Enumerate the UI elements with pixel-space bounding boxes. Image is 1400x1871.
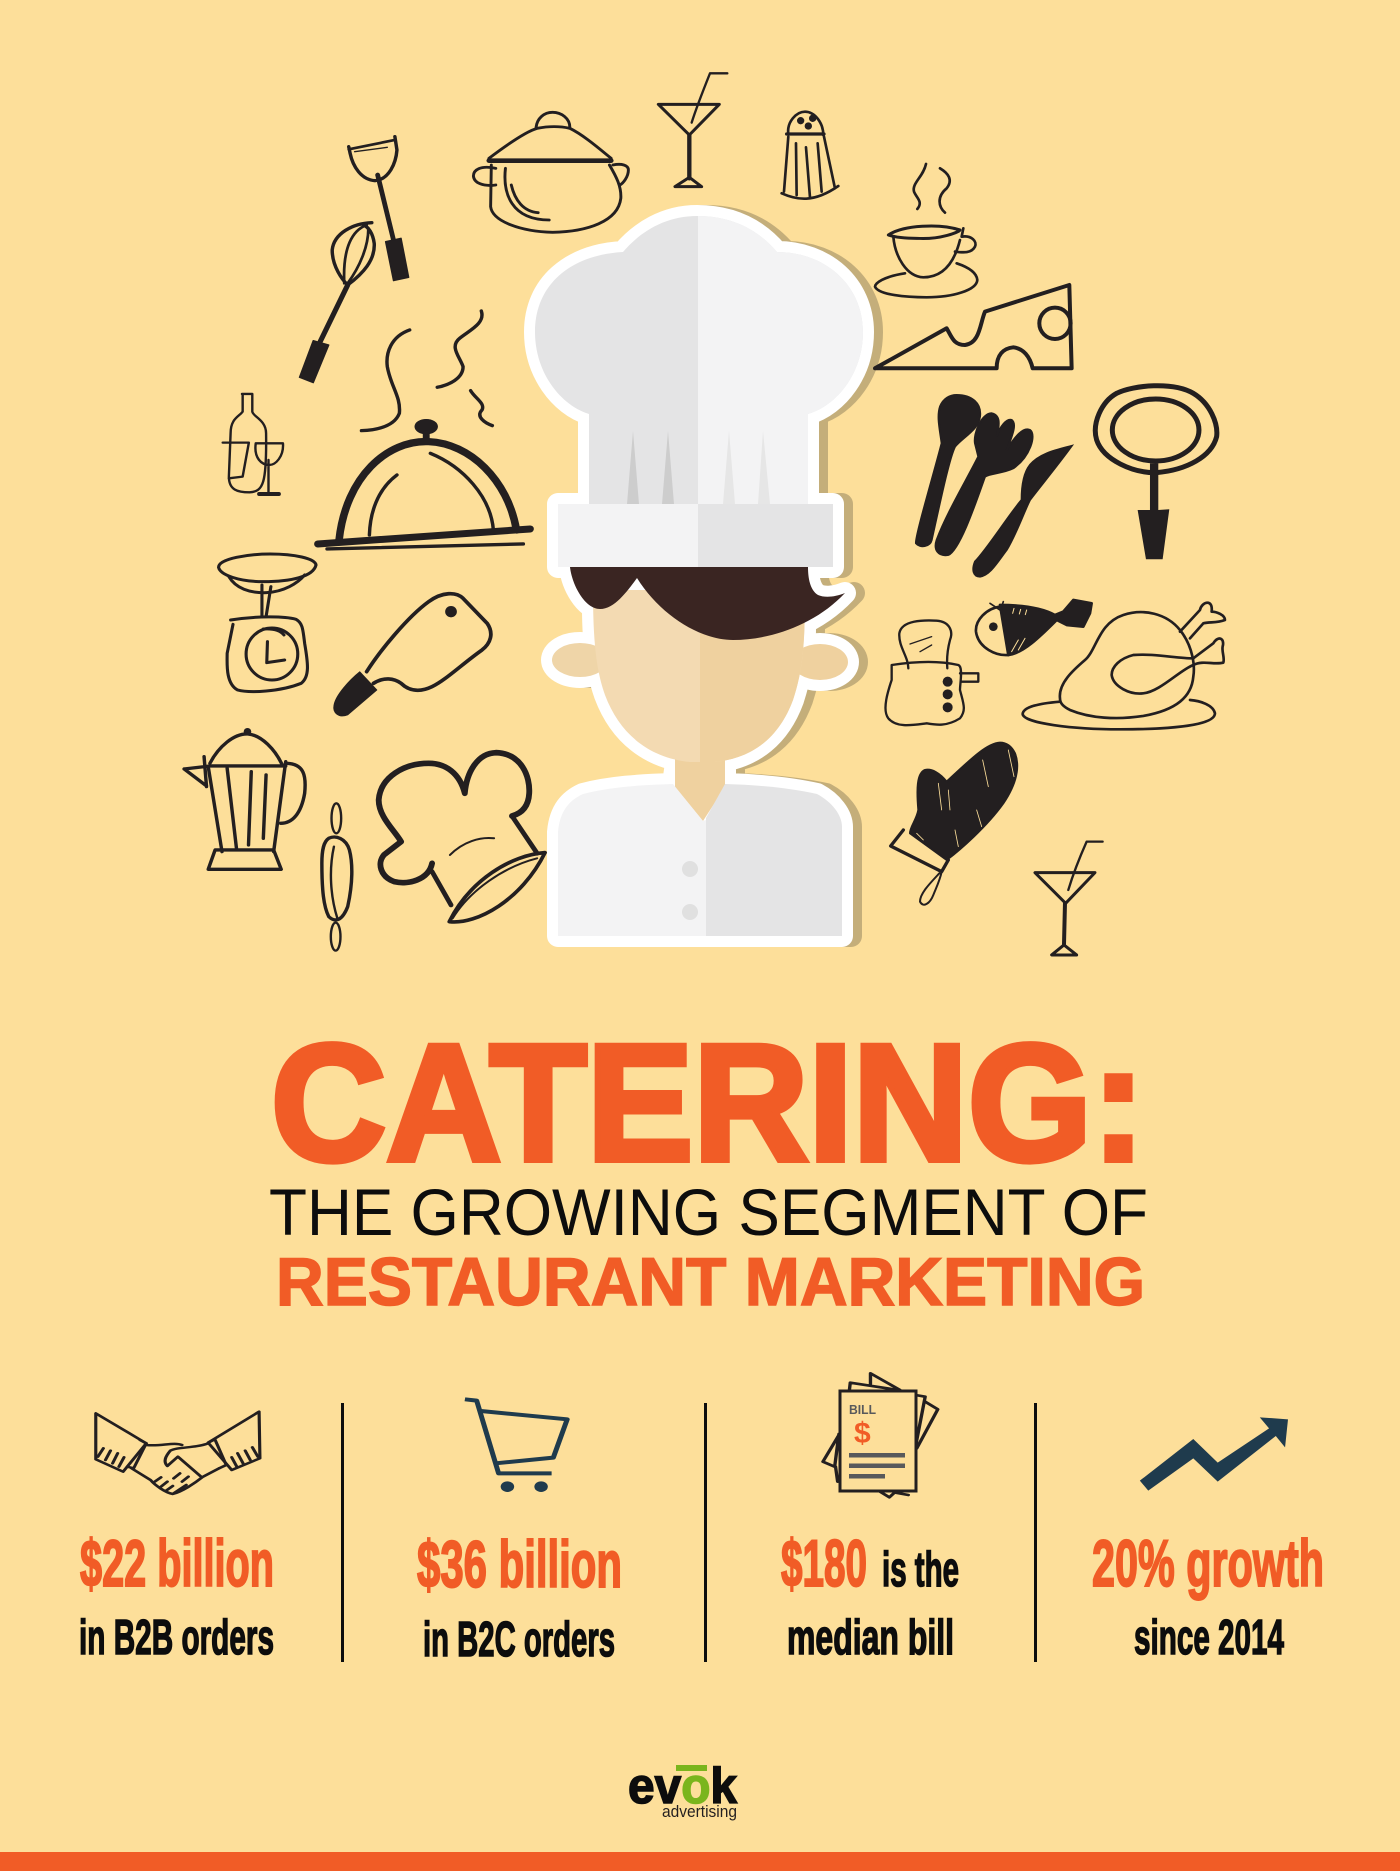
icon: coffee pot [184, 728, 305, 869]
stat label: since 2014 [1134, 1611, 1284, 1665]
icon: bill [823, 1373, 938, 1497]
icon: peeler [349, 137, 409, 281]
icon: steam [361, 311, 492, 431]
icon: cloche [318, 419, 530, 549]
bill back sheets [823, 1373, 938, 1497]
icon: chef hat sketch [379, 753, 545, 922]
bill dollar sign: $ [854, 1417, 871, 1450]
subtitle line 2: RESTAURANT MARKETING [276, 1244, 1145, 1320]
icon: coffee cup [875, 164, 977, 297]
chef drop shadow [544, 216, 872, 936]
stat: median bill [781, 1526, 959, 1665]
divider 2 [704, 1403, 707, 1662]
icon: salt shaker [782, 112, 838, 199]
bill front sheet [840, 1391, 916, 1491]
icon: cleaver [334, 594, 491, 716]
icon: shopping cart [465, 1399, 567, 1492]
icon: kitchen scale [219, 554, 316, 692]
bottom bar [0, 1852, 1400, 1871]
icon: pan lid [1095, 386, 1217, 559]
icon: fish [976, 600, 1092, 655]
icon: rolling pin [322, 803, 352, 951]
logo: evok advertising [628, 1758, 737, 1821]
icon: whisk [299, 223, 374, 383]
divider 3 [1034, 1403, 1037, 1662]
title [269, 1011, 1148, 1320]
chef jacket [558, 784, 842, 936]
icon: toaster [885, 620, 978, 725]
icon: roast turkey [1023, 603, 1225, 729]
icon: oven mitt [891, 743, 1017, 905]
icon: cooking pot [473, 112, 628, 232]
stat inline label: is the [882, 1543, 959, 1597]
logo tagline: advertising [662, 1802, 737, 1821]
stat value: $36 billion [417, 1527, 622, 1601]
bill label: BILL [849, 1402, 876, 1417]
divider 1 [341, 1403, 344, 1662]
stat label: median bill [787, 1611, 954, 1665]
chef hair [570, 567, 845, 640]
stat value: $180 [781, 1526, 867, 1600]
icon: spoon fork knife [916, 395, 1072, 577]
chef ears [552, 643, 848, 680]
chef white outline [535, 216, 863, 936]
chef neck [675, 750, 725, 821]
icon: handshake [96, 1412, 260, 1494]
icon: growth arrow [1140, 1417, 1288, 1491]
stat: b2b [79, 1526, 274, 1665]
icon: cheese wedge [875, 285, 1072, 368]
stat label: in B2B orders [79, 1611, 274, 1665]
stat label: in B2C orders [423, 1613, 615, 1667]
icon: martini glass top [658, 73, 727, 187]
stat: b2c [417, 1527, 622, 1667]
chef figure [535, 216, 872, 936]
heading: catering: CATERING: [271, 1011, 1145, 1196]
subtitle line 1: THE GROWING SEGMENT OF [269, 1175, 1148, 1249]
chef face [593, 590, 805, 762]
logo wordmark: evok [628, 1758, 737, 1814]
stat: growth [1092, 1526, 1324, 1665]
icon: martini glass bottom [1035, 842, 1103, 955]
logo bar over o [676, 1765, 707, 1771]
icon: wine bottle and glasses [223, 394, 283, 494]
chef hat [535, 216, 863, 567]
bill lines [849, 1453, 905, 1478]
stat value: $22 billion [80, 1526, 274, 1600]
